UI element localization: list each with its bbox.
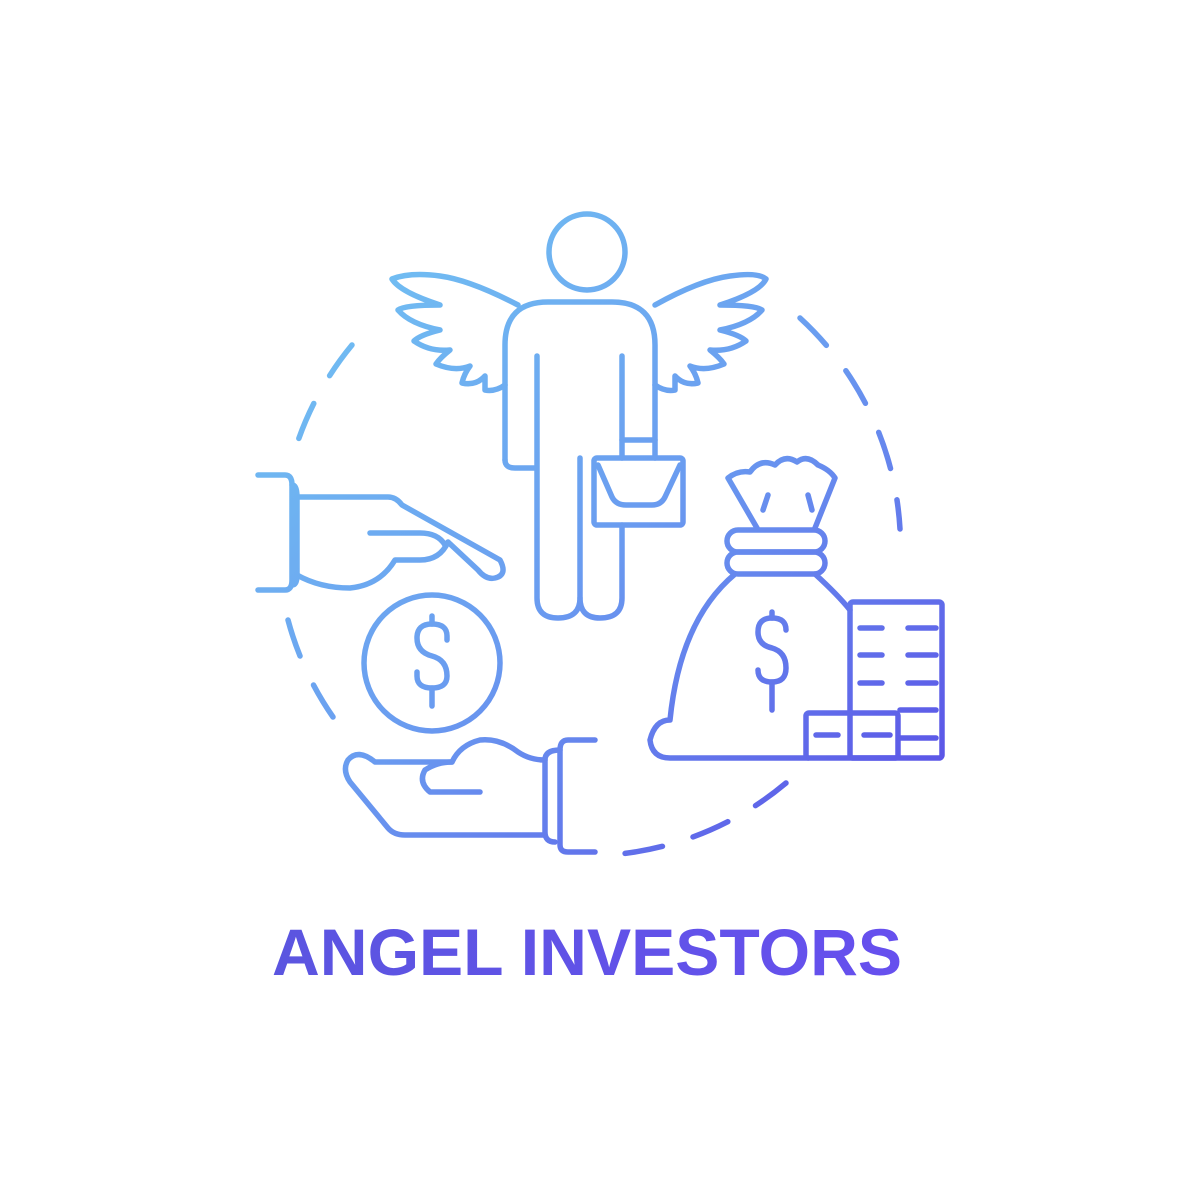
icon: money bag with coin stacks [650,459,942,758]
icon: angel investor figure [392,214,766,618]
icon: receiving hand (bottom) [345,740,595,852]
dashed circle: bottom-right arc [620,783,786,854]
icon: giving hand (top) [258,475,503,590]
dashed circle: right arc [800,318,900,529]
left wing [392,275,518,390]
right wing [655,275,766,390]
briefcase [594,458,683,525]
title: ANGEL INVESTORS [272,915,902,989]
dashed circle: lower-left arc [288,620,333,717]
icon: dollar coin [364,595,500,731]
dashed circle: upper-left arc [292,345,352,460]
